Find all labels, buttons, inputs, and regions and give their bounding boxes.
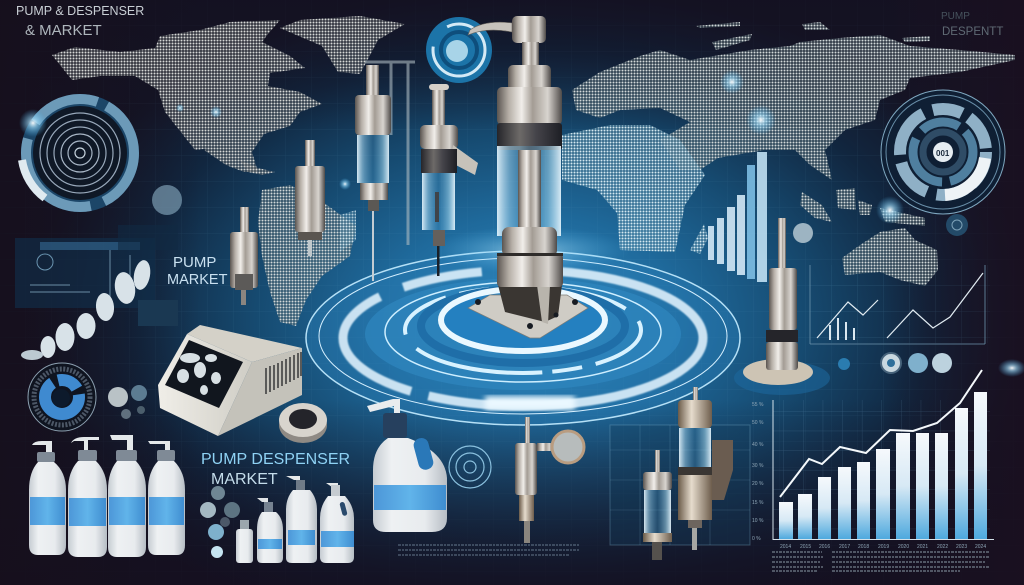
- fine print: centre bottom: [398, 545, 580, 555]
- pump: bottom glass right: [678, 387, 733, 550]
- heading: top right: PUMP: [941, 11, 970, 22]
- bottle: large jug: [367, 399, 447, 532]
- label: pump market: MARKET: [167, 272, 228, 288]
- bottle 4: [148, 441, 185, 555]
- dotted world map: [52, 16, 1015, 326]
- bottles: small group: [236, 476, 354, 563]
- map: south america: [258, 185, 356, 326]
- map: south east asia islands: [800, 188, 925, 226]
- fine print: below chart: [772, 552, 990, 571]
- pump: bottom gauge: [515, 417, 584, 543]
- device screen: [165, 340, 243, 408]
- glass cylinder: [497, 146, 561, 236]
- label: pump dispenser market: MARKET: [211, 471, 278, 488]
- chart axis labels: 40 %: [752, 442, 764, 448]
- bottle 3: [108, 435, 146, 557]
- chart trend line: [780, 370, 982, 497]
- chart axis labels: 20 %: [752, 481, 764, 487]
- heading: top left: [16, 4, 144, 39]
- dial: top centre swirl: [426, 17, 492, 83]
- label: pump market: [167, 254, 228, 288]
- chart axis labels: 2017: [839, 544, 850, 550]
- icons: small discs beside donut: [108, 385, 147, 419]
- chart axis labels: 2018: [858, 544, 869, 550]
- small bottle 3: [286, 476, 317, 563]
- collar groove: [497, 253, 563, 256]
- label: pump dispenser market: PUMP DESPENSER: [201, 451, 350, 468]
- icons: scattered pills: [200, 486, 240, 558]
- heading: top right: [941, 11, 1003, 38]
- ovals: white capsules: [21, 259, 152, 360]
- chart axis labels: 2019: [878, 544, 889, 550]
- main bar chart: [752, 370, 994, 550]
- pump spout: [468, 22, 512, 35]
- map: europe and asia: [572, 35, 1015, 180]
- map: left fragment: [340, 210, 356, 252]
- main pump: [468, 16, 588, 338]
- pump cap: [512, 16, 546, 43]
- small bottle 1: [236, 520, 253, 563]
- chart axis labels: [752, 402, 986, 550]
- chart axis labels: 2023: [956, 544, 967, 550]
- pump dark band: [497, 123, 562, 150]
- device top: [187, 325, 302, 362]
- bracket leg: [537, 285, 550, 324]
- chart grid: [773, 400, 990, 539]
- map: australia: [842, 228, 938, 286]
- icon row: right: [838, 353, 1024, 377]
- chart axis labels: 2021: [917, 544, 928, 550]
- chart axis labels: 2024: [975, 544, 986, 550]
- device side: [218, 348, 302, 436]
- dial: lower left donut: [28, 363, 96, 431]
- pump: left lower: [230, 207, 258, 305]
- lower collar: [502, 227, 557, 257]
- map: madagascar: [690, 224, 708, 254]
- pump: bottom cylinder left: [643, 450, 672, 560]
- pump rod: [518, 150, 541, 234]
- pump: left small: [295, 140, 325, 256]
- heading: top left: & MARKET: [25, 22, 102, 39]
- chart axis labels: 30 %: [752, 463, 764, 469]
- chart axis labels: 10 %: [752, 518, 764, 524]
- device screen buttons: [177, 353, 221, 395]
- map: greenland: [280, 16, 405, 74]
- icons: droplet and print: [793, 214, 968, 243]
- bottle 2: [68, 437, 107, 557]
- label: pump market: PUMP: [173, 254, 216, 271]
- map: caribbean: [240, 160, 275, 175]
- bottle 1: [29, 441, 66, 555]
- bar chart: mid right rising bars: [708, 152, 767, 282]
- chart axis labels: 2020: [898, 544, 909, 550]
- device side vents: [266, 352, 301, 394]
- pump: bracket needle centre: [420, 84, 478, 276]
- bottles: row of four: [29, 435, 185, 557]
- data collage: left panels: [15, 185, 182, 326]
- pump upper band: [497, 87, 562, 125]
- small bottle 2: [257, 498, 283, 563]
- icon: steel ring: [279, 403, 327, 443]
- dial: top right target: 001: [936, 149, 950, 158]
- highlights: glow spots: [176, 70, 904, 224]
- plate screws: [475, 299, 578, 329]
- map: arctic strips: [696, 22, 930, 50]
- chart axis labels: 55 %: [752, 402, 764, 408]
- map: africa: [562, 125, 705, 252]
- device front: [158, 334, 252, 436]
- map: north america: [52, 20, 322, 172]
- pump: right with base: [734, 218, 830, 395]
- pump: frame and needle left: [355, 62, 415, 281]
- chart axis: [773, 400, 994, 540]
- screen panel behind bottom pumps: [610, 425, 750, 545]
- pump collar: [508, 65, 551, 103]
- chart axis labels: 2022: [937, 544, 948, 550]
- chart axis labels: 2015: [800, 544, 811, 550]
- chart axis labels: 2016: [819, 544, 830, 550]
- dial: top left spiral: [19, 94, 139, 212]
- base plate: [468, 295, 588, 338]
- label: pump dispenser market: [201, 451, 350, 488]
- chart axis labels: 50 %: [752, 420, 764, 426]
- small bottle 4: [320, 483, 354, 563]
- heading: top right: DESPENTT: [942, 26, 1003, 38]
- chart axis labels: 2014: [780, 544, 791, 550]
- base bracket: [498, 285, 562, 322]
- line charts: mid right: [810, 265, 990, 344]
- platform rings: [306, 226, 740, 425]
- chart bars: [779, 392, 987, 539]
- icon: target near gauge: [449, 446, 491, 488]
- dial: top right target: [881, 90, 1005, 214]
- chart axis labels: 0 %: [752, 536, 761, 542]
- lower band: [497, 254, 563, 287]
- pump stem: [522, 42, 539, 68]
- heading: top left: PUMP & DESPENSER: [16, 4, 144, 18]
- device: control unit: [158, 325, 302, 436]
- chart axis labels: 15 %: [752, 500, 764, 506]
